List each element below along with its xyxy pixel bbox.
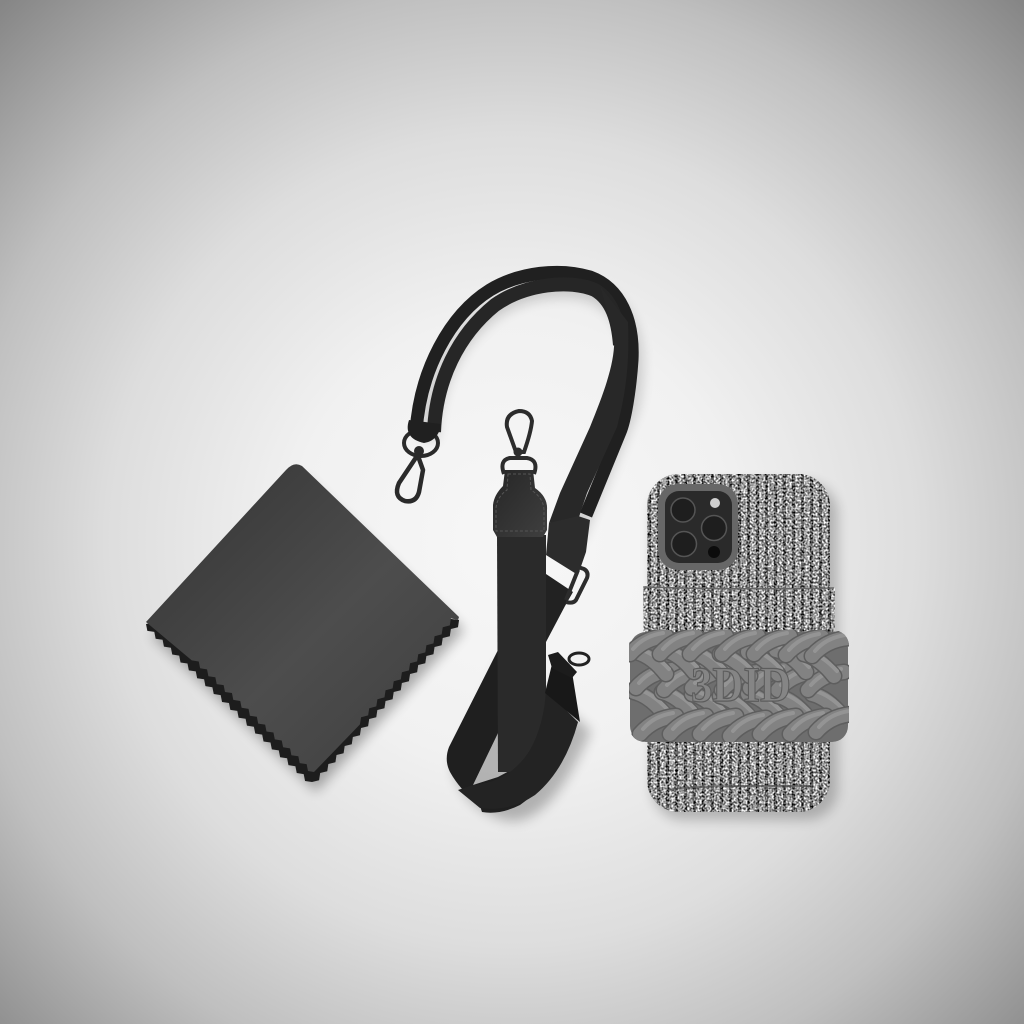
camera surround <box>658 484 738 570</box>
front loop band <box>458 690 578 809</box>
flat strap section <box>549 286 628 523</box>
knit case body <box>647 474 830 812</box>
phone in knit case <box>630 474 852 820</box>
cloth shadow <box>152 476 464 792</box>
camera glass <box>665 491 732 563</box>
tab stitching <box>496 474 544 531</box>
carabiner hook <box>507 411 532 452</box>
strap fold lower <box>546 574 573 642</box>
knit pocket <box>643 586 835 720</box>
lens middle right <box>702 516 726 540</box>
case shadow <box>652 482 838 820</box>
bottom flap seam <box>668 786 810 790</box>
band base <box>630 632 848 742</box>
leather strap tab <box>493 470 547 537</box>
centre swivel clasp <box>502 411 535 474</box>
buckle ring <box>569 653 589 665</box>
cloth zigzag lower layer <box>146 600 459 782</box>
pocket top edge <box>644 587 834 589</box>
loop shadow <box>453 656 591 821</box>
tab body <box>493 470 547 537</box>
lens bottom left <box>672 532 696 556</box>
braided band <box>630 632 852 742</box>
rear loop band <box>447 650 540 813</box>
swivel ring <box>404 430 438 456</box>
flash <box>710 498 720 508</box>
microfiber cloth <box>146 464 464 792</box>
strap shadow <box>428 288 634 538</box>
strap fold upper <box>546 516 590 575</box>
long lanyard strap <box>416 272 634 642</box>
inner strand <box>434 284 620 432</box>
strap end <box>408 420 441 443</box>
sensor <box>708 546 720 558</box>
buckle hardware <box>548 652 577 678</box>
left swivel clasp <box>397 420 441 501</box>
braid strands <box>634 689 667 714</box>
cloth face <box>146 464 459 772</box>
adjuster slider ring <box>566 567 588 603</box>
hook body <box>397 456 423 501</box>
wide strap loop with buckle <box>447 535 591 821</box>
camera module <box>658 484 738 570</box>
lens top left <box>671 498 695 522</box>
buckle leather tab <box>545 664 580 722</box>
embossed 3DID lettering: 3DID <box>691 656 791 712</box>
vertical wide strap <box>497 535 546 772</box>
D ring <box>502 458 535 474</box>
back strand <box>416 272 632 515</box>
